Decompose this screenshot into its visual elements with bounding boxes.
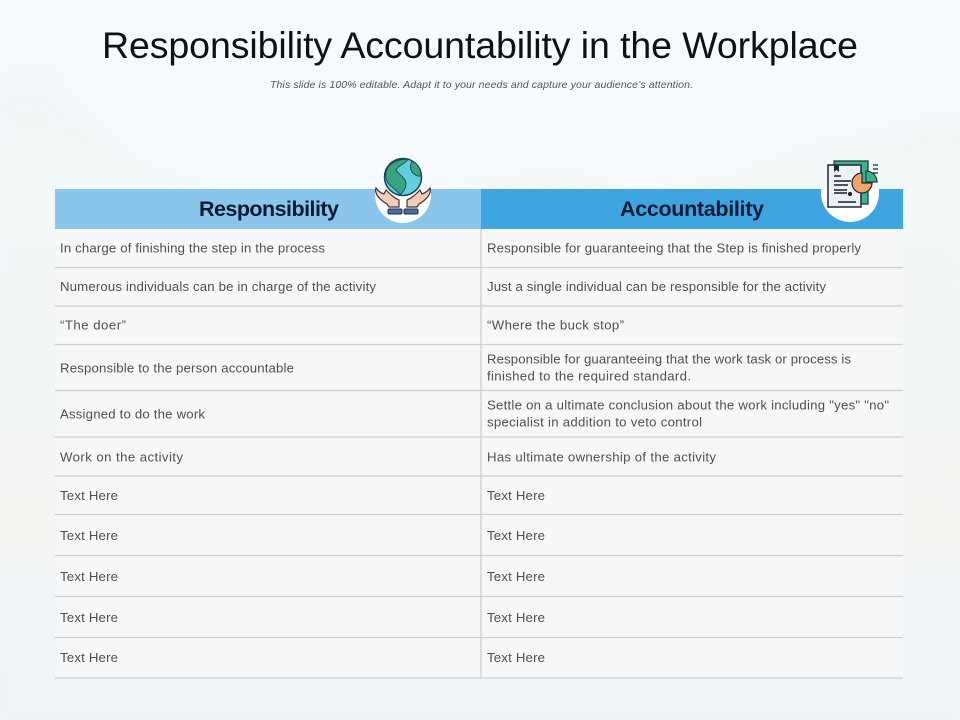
right column: accountability text: Text Here: [487, 528, 545, 543]
right column: accountability text: [487, 240, 889, 665]
left column: responsibility text: Numerous individuals can be in charge of the activity: [60, 279, 376, 294]
right column: accountability text: Settle on a ultimate conclusion about the work including "yes" "no": [487, 398, 889, 412]
left column: responsibility text: Work on the activity: [60, 450, 183, 464]
right column: accountability text: Text Here: [487, 488, 545, 503]
right column: accountability text: finished to the required standard.: [487, 368, 691, 384]
icon: report with pie chart: [821, 161, 879, 222]
header: Responsibility: Responsibility: [199, 197, 339, 221]
left column: responsibility text: [60, 240, 376, 665]
header: Accountability: [481, 189, 903, 229]
left column: responsibility text: Text Here: [60, 569, 118, 584]
right column: accountability text: Text Here: [487, 650, 545, 665]
title: Responsibility Accountability in the Workplace: [102, 24, 858, 66]
left column: responsibility text: Assigned to do the work: [60, 406, 205, 422]
header: Accountability: Accountability: [620, 197, 764, 221]
right column: accountability text: Text Here: [487, 610, 545, 625]
right column: accountability text: specialist in addition to veto control: [487, 414, 702, 430]
icon: hands holding globe: [375, 158, 431, 223]
left column: responsibility text: “The doer”: [60, 318, 126, 332]
right column: accountability text: Text Here: [487, 569, 545, 584]
left column: responsibility text: In charge of finishing the step in the process: [60, 240, 325, 256]
right column: accountability text: Responsible for guaranteeing that the work task or process is: [487, 352, 851, 366]
header: Responsibility: [55, 189, 481, 229]
right column: accountability text: Responsible for guaranteeing that the Step is finished properly: [487, 240, 861, 256]
right column: accountability text: Just a single individual can be responsible for the activity: [487, 279, 826, 294]
left column: responsibility text: Text Here: [60, 650, 118, 665]
left column: responsibility text: Responsible to the person accountable: [60, 360, 294, 376]
right column: accountability text: “Where the buck stop”: [487, 318, 624, 332]
left column: responsibility text: Text Here: [60, 610, 118, 625]
left column: responsibility text: Text Here: [60, 528, 118, 543]
table: [55, 158, 903, 678]
left column: responsibility text: Text Here: [60, 488, 118, 503]
row dividers: [55, 229, 903, 678]
table body background: [55, 229, 903, 678]
subtitle: This slide is 100% editable. Adapt it to your needs and capture your audience’s attention.: [270, 79, 693, 91]
right column: accountability text: Has ultimate ownership of the activity: [487, 450, 716, 464]
